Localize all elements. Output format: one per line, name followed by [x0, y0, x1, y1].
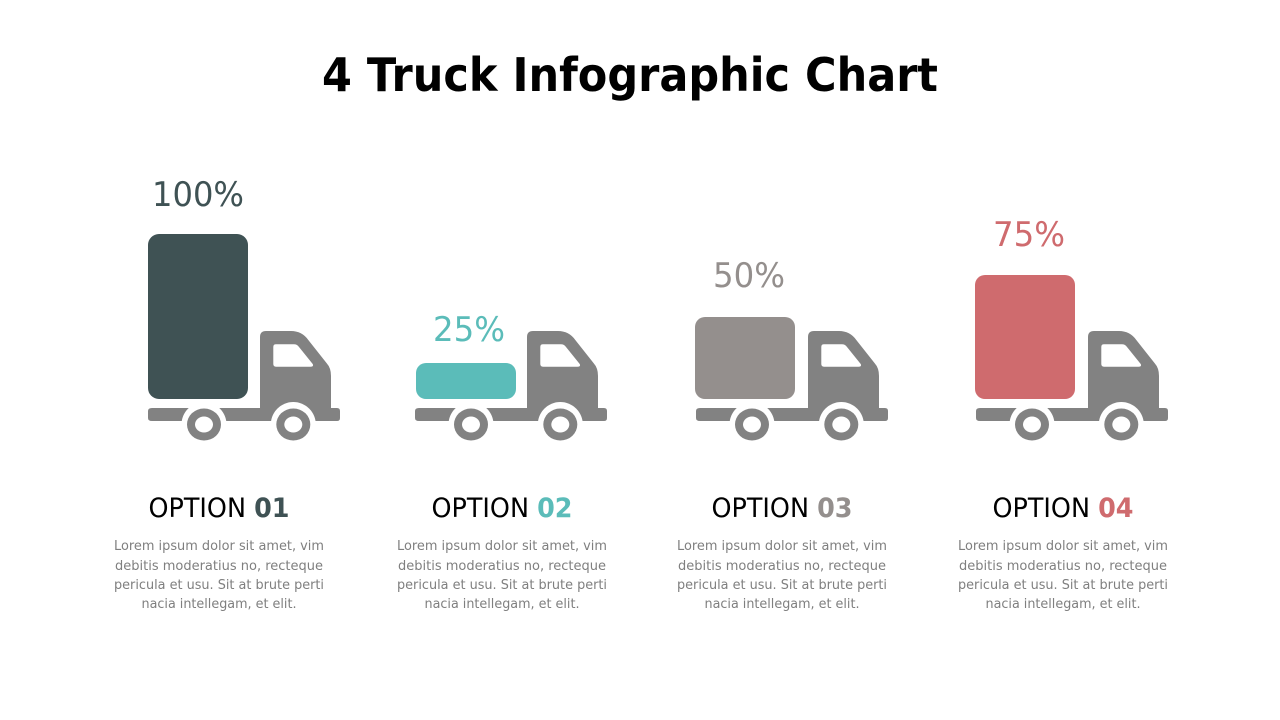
- description 3: pericula et usu. Sit at brute perti: [677, 578, 887, 593]
- description 2: pericula et usu. Sit at brute perti: [397, 578, 607, 593]
- description 3: [677, 539, 887, 612]
- cargo bar 50%: [695, 317, 795, 399]
- description 2: debitis moderatius no, recteque: [398, 559, 606, 574]
- description 1: pericula et usu. Sit at brute perti: [114, 578, 324, 593]
- cargo bar 75%: [975, 275, 1075, 399]
- description 2: Lorem ipsum dolor sit amet, vim: [397, 539, 607, 554]
- icon: truck 1: [130, 331, 360, 447]
- description 2: nacia intellegam, et elit.: [424, 597, 580, 612]
- description 2: [397, 539, 607, 612]
- description 3: nacia intellegam, et elit.: [704, 597, 860, 612]
- description 4: debitis moderatius no, recteque: [959, 559, 1167, 574]
- cargo bar 100%: [148, 234, 248, 399]
- percentage: 75%: 75%: [993, 215, 1065, 255]
- panel: option 1: [114, 175, 360, 612]
- description 4: Lorem ipsum dolor sit amet, vim: [958, 539, 1168, 554]
- description 1: nacia intellegam, et elit.: [142, 597, 296, 612]
- percentage: 50%: 50%: [713, 256, 785, 296]
- description 3: Lorem ipsum dolor sit amet, vim: [677, 539, 887, 554]
- panel: option 3: [677, 256, 908, 612]
- icon: truck 2: [397, 331, 627, 447]
- panel: option 2: [397, 310, 627, 612]
- icon: truck 4: [958, 331, 1188, 447]
- description 1: debitis moderatius no, recteque: [115, 559, 323, 574]
- description 4: pericula et usu. Sit at brute perti: [958, 578, 1168, 593]
- heading: option 02: OPTION 02: [432, 493, 572, 524]
- panel: option 4: [958, 215, 1188, 612]
- heading: option 03: OPTION 03: [712, 493, 852, 524]
- heading: option 04: OPTION 04: [992, 493, 1134, 524]
- heading: option 01: OPTION 01: [148, 493, 290, 524]
- cargo bar 25%: [416, 363, 516, 399]
- percentage: 100%: 100%: [152, 175, 244, 215]
- description 1: Lorem ipsum dolor sit amet, vim: [114, 539, 324, 554]
- description 3: debitis moderatius no, recteque: [678, 559, 886, 574]
- icon: truck 3: [678, 331, 908, 447]
- description 4: [958, 539, 1168, 612]
- description 1: [114, 539, 324, 612]
- percentage: 25%: 25%: [433, 310, 505, 350]
- title: 4 Truck Infographic Chart: [322, 48, 938, 102]
- description 4: nacia intellegam, et elit.: [986, 597, 1140, 612]
